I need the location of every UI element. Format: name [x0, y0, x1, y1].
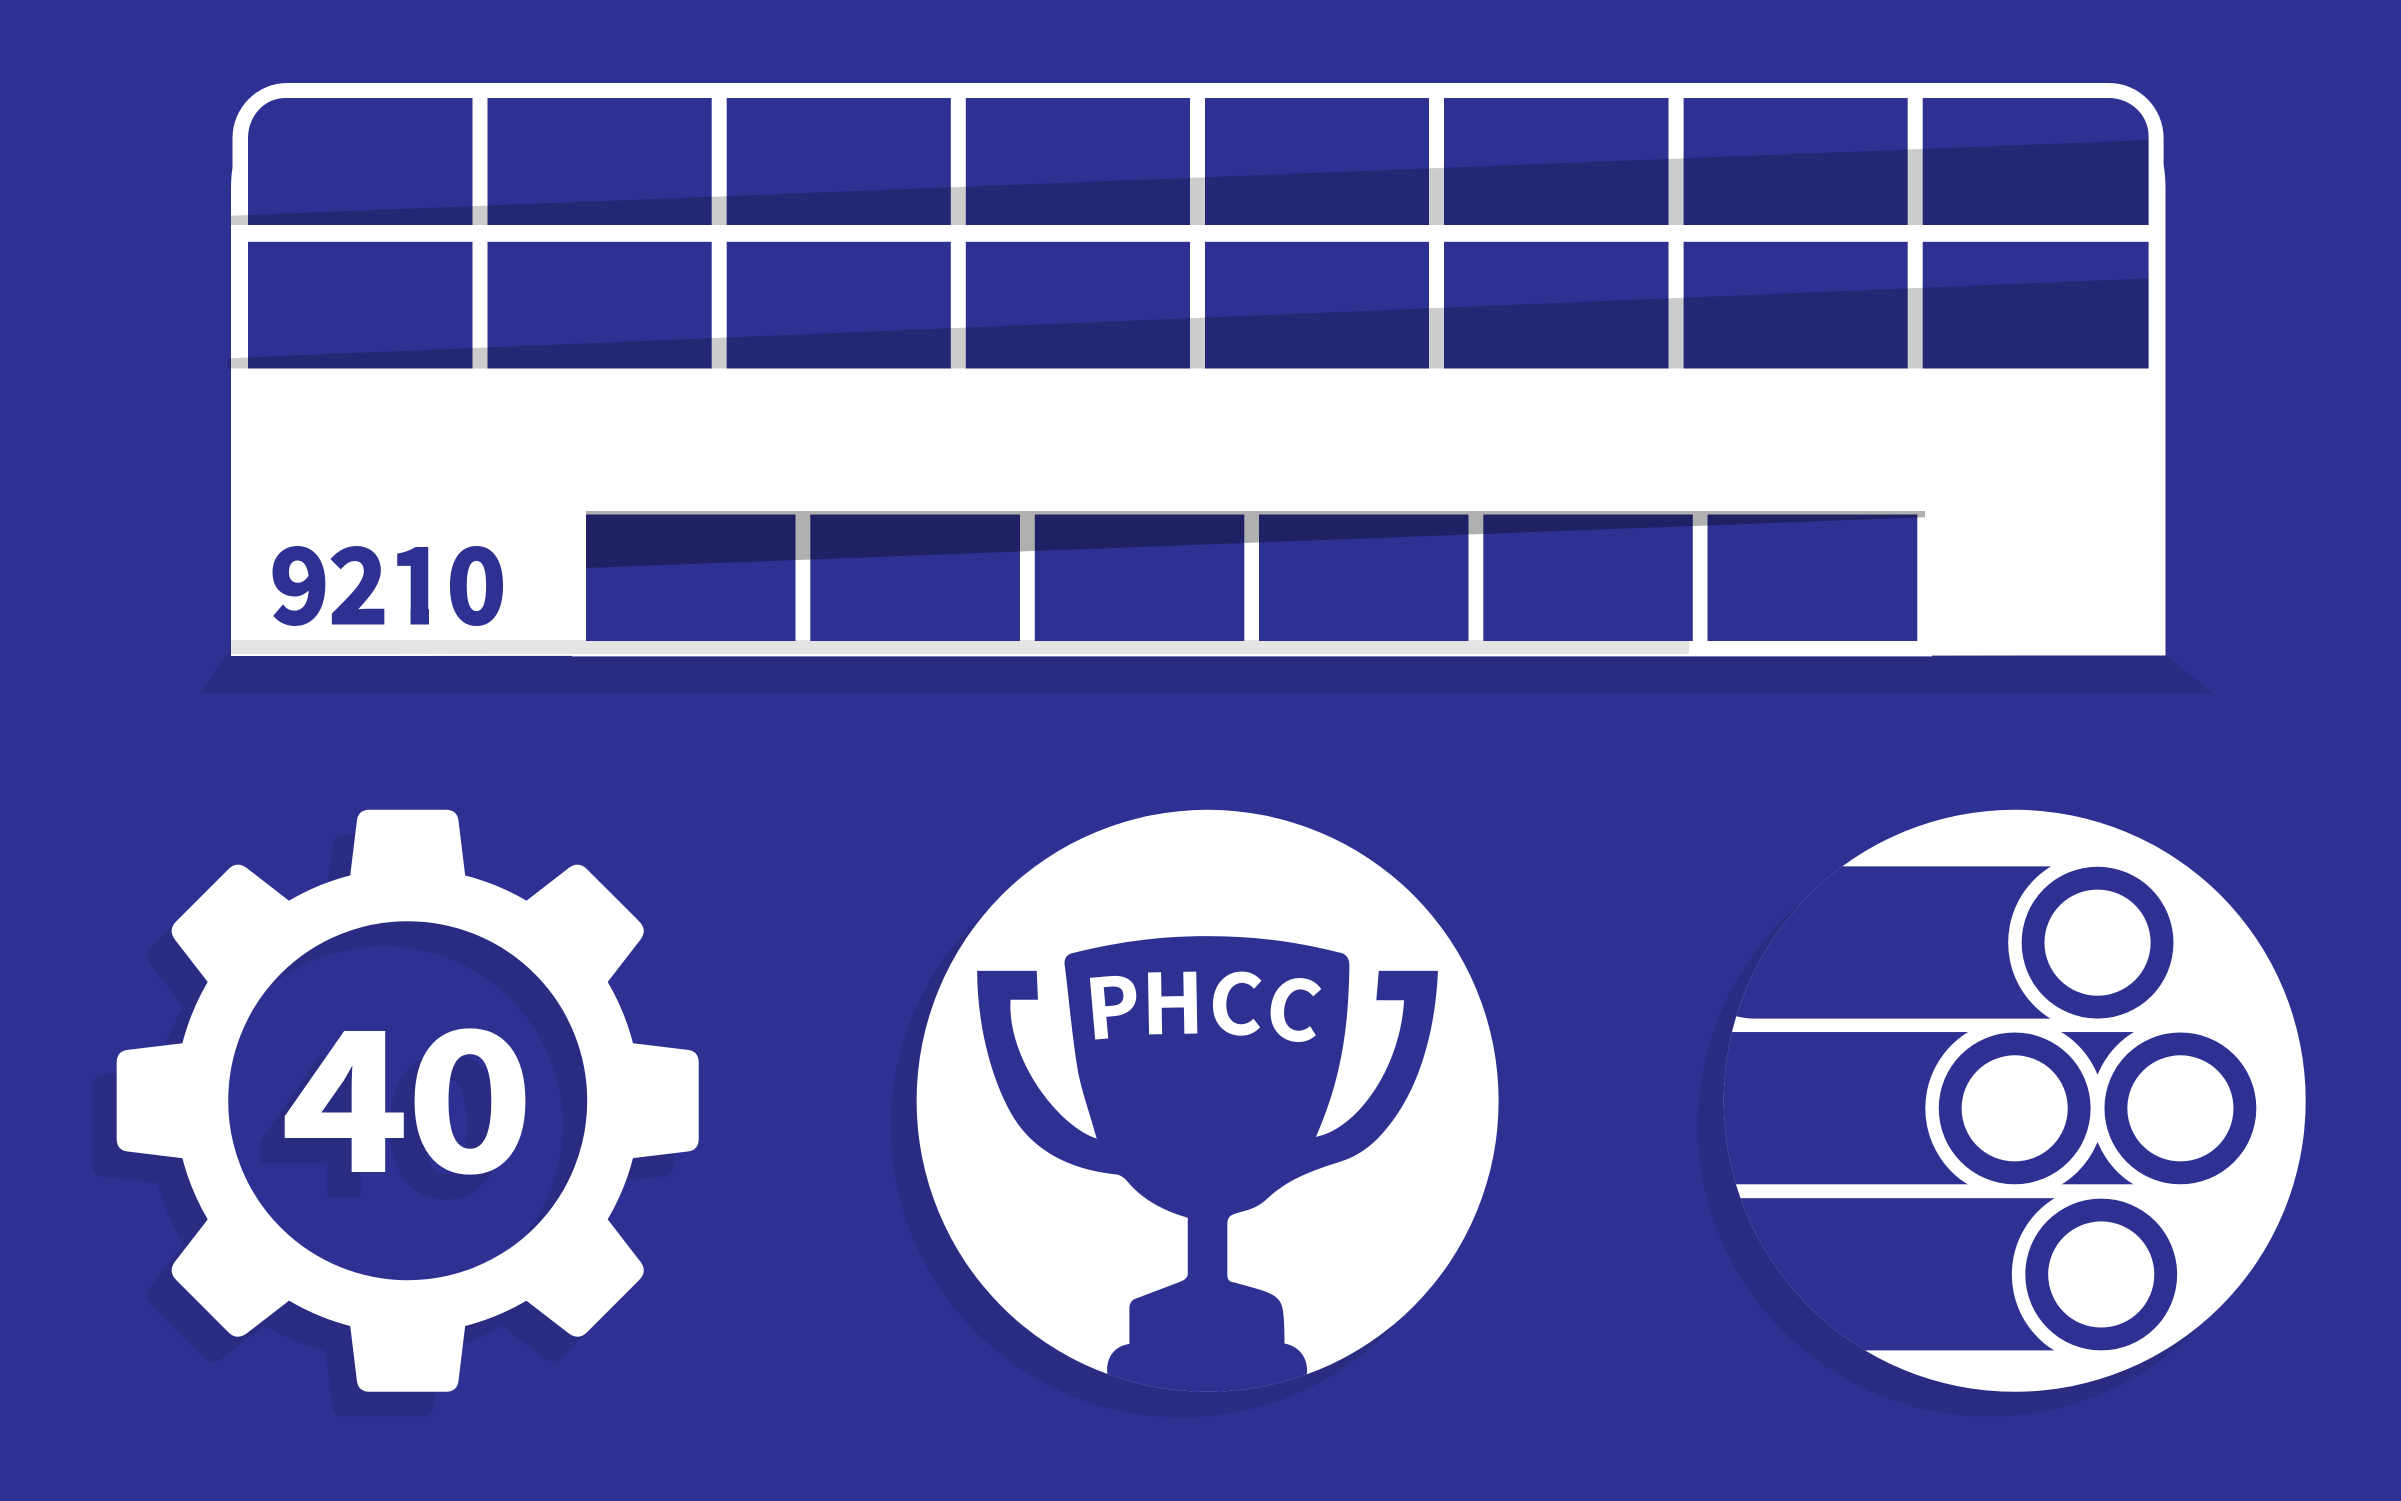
trophy label: PHCC [1080, 937, 1330, 1067]
panel: pipes icon [1680, 810, 2306, 1416]
upper window row [248, 98, 2149, 225]
panel: gear icon [92, 810, 699, 1417]
ground floor window shade [586, 511, 1925, 568]
pipe body: middle [1724, 1032, 2134, 1184]
gear number: 40 [282, 950, 532, 1225]
ground floor window row [586, 514, 1917, 641]
pipes circle [1724, 810, 2306, 1392]
pipe bundle [1724, 866, 2256, 1350]
gear number shadow: 40 [258, 975, 508, 1250]
upper row window shade [231, 140, 2149, 225]
pipe ends [1925, 853, 2270, 1364]
middle window row [248, 242, 2149, 368]
building number: 9210 [270, 504, 506, 653]
panel: trophy icon [891, 810, 1499, 1418]
trophy silhouette [977, 936, 1438, 1410]
panel: building [200, 83, 2212, 693]
trophy circle [917, 810, 1499, 1392]
ground floor sill [572, 640, 1932, 656]
trophy circle shadow [891, 836, 1473, 1418]
pipe body: top [1736, 866, 2052, 1019]
pipes circle shadow [1698, 834, 2280, 1416]
gear shadow [92, 835, 674, 1417]
building ground shadow [200, 649, 2212, 693]
middle row window shade [228, 278, 2149, 368]
pipe body: bottom [1740, 1198, 2055, 1350]
building body [231, 83, 2166, 656]
gear [117, 810, 699, 1392]
sill light band [231, 640, 1689, 654]
